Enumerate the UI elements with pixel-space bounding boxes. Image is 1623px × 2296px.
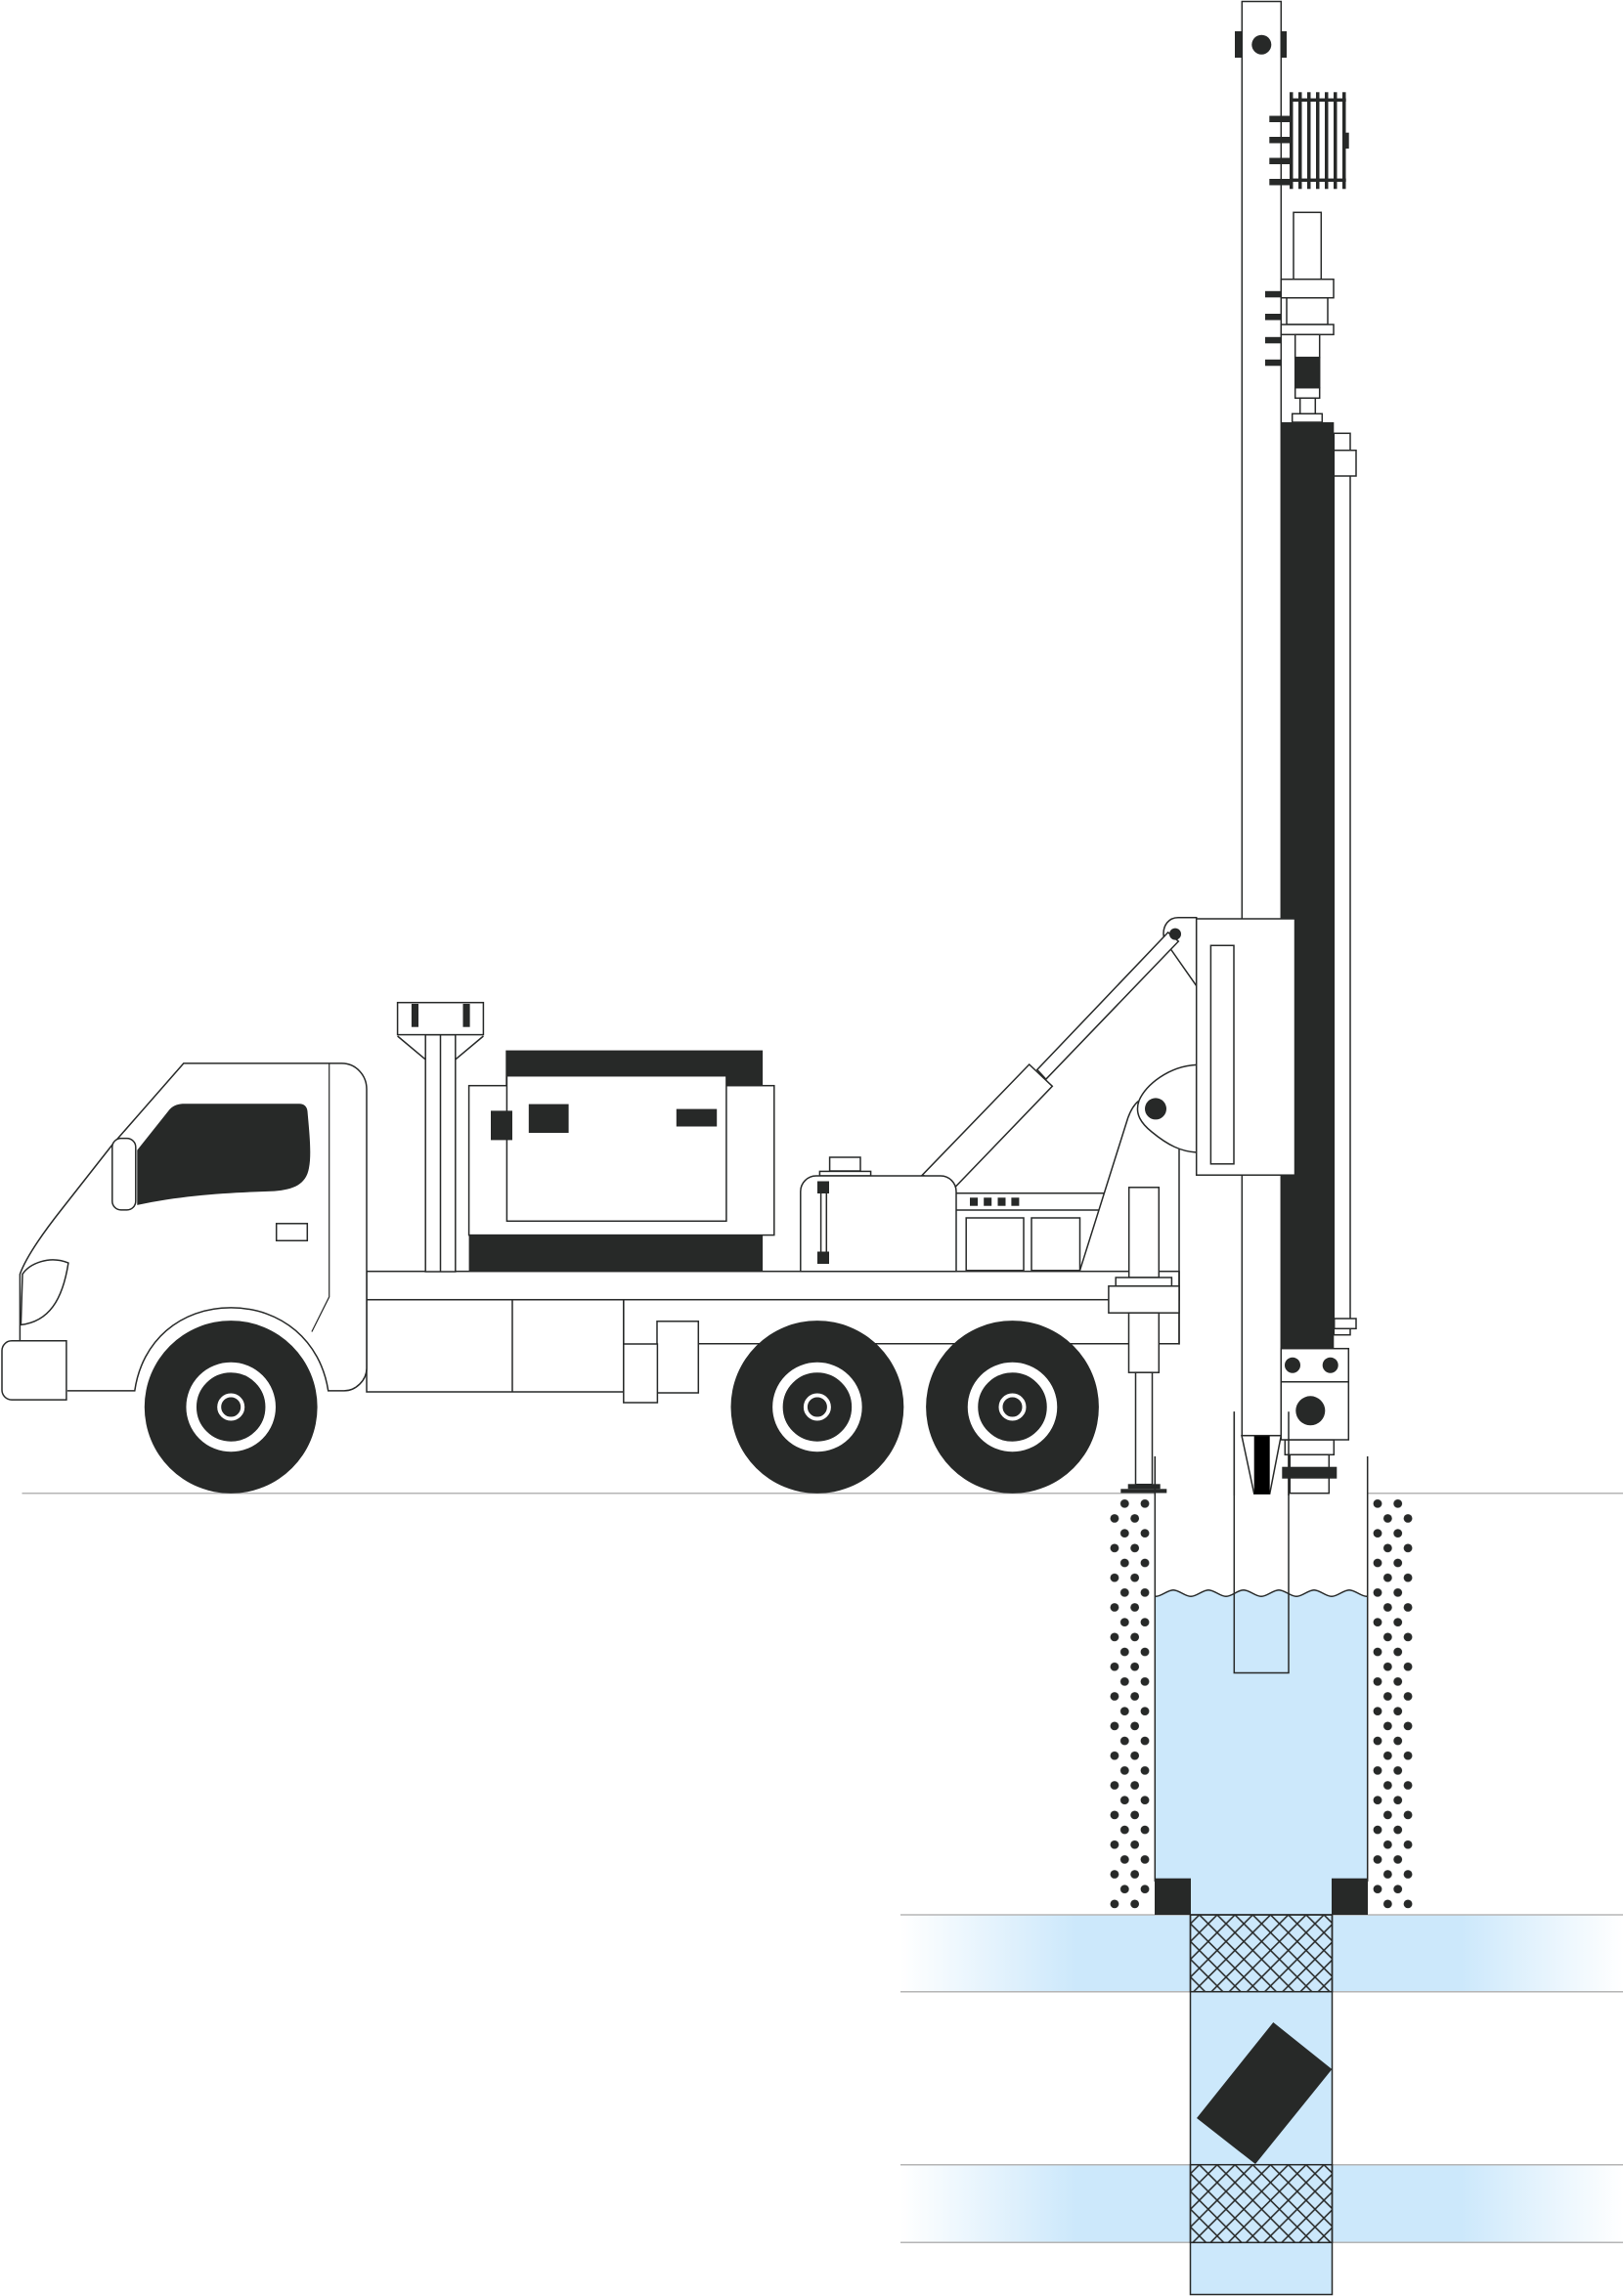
gravel pack right: [1373, 1498, 1414, 1910]
upper well screen mesh: [1191, 1915, 1332, 1992]
right grout seal: [1332, 1879, 1368, 1915]
inner pipe upper section over head: [1234, 1411, 1289, 1495]
well screen column: [1191, 1915, 1332, 2295]
generator unit: [469, 1051, 774, 1272]
outrigger jack: [1109, 1188, 1179, 1494]
upper aquifer band: [900, 1915, 1623, 1992]
submersible pump block: [1197, 2022, 1332, 2164]
borehole casing walls: [1155, 1456, 1368, 1882]
hydraulic cylinder: [922, 932, 1178, 1188]
gravel pack left: [1110, 1498, 1150, 1910]
lower mast head block: [1281, 1349, 1348, 1494]
left grout seal: [1155, 1879, 1191, 1915]
water in borehole: [1156, 1590, 1367, 1915]
control panel housing: [956, 1193, 1104, 1271]
rear right wheel: [926, 1321, 1099, 1494]
ground surface lines: [22, 1493, 1623, 1495]
rear support frame line: [1079, 1101, 1138, 1271]
water surface wave: [1156, 1590, 1367, 1596]
front wheel: [145, 1321, 318, 1494]
mast pivot lobe: [1137, 1064, 1197, 1152]
mast carriage box: [1197, 919, 1294, 1175]
inner drill pipe: [1234, 1411, 1289, 1673]
side rail with clamps: [1334, 433, 1356, 1335]
exhaust stack: [398, 1003, 483, 1272]
rear frame upright: [1178, 1149, 1180, 1345]
lower well screen mesh: [1191, 2165, 1332, 2242]
main drilling mast: [1235, 2, 1287, 1436]
drill bit: [1242, 1436, 1281, 1494]
cylinder pin: [1169, 929, 1181, 940]
mast upper bracket: [1163, 918, 1197, 986]
rear left wheel: [731, 1321, 903, 1494]
black feed beam: [1281, 422, 1334, 1349]
truck cab: [2, 1063, 367, 1400]
radiator cooler: [1269, 92, 1349, 189]
top drive stack: [1265, 212, 1334, 422]
borehole wall stub over jack foot: [1154, 1456, 1156, 1495]
truck chassis and deck: [367, 1272, 1179, 1403]
hydraulic tank: [801, 1157, 956, 1272]
lower aquifer band: [900, 2165, 1623, 2242]
